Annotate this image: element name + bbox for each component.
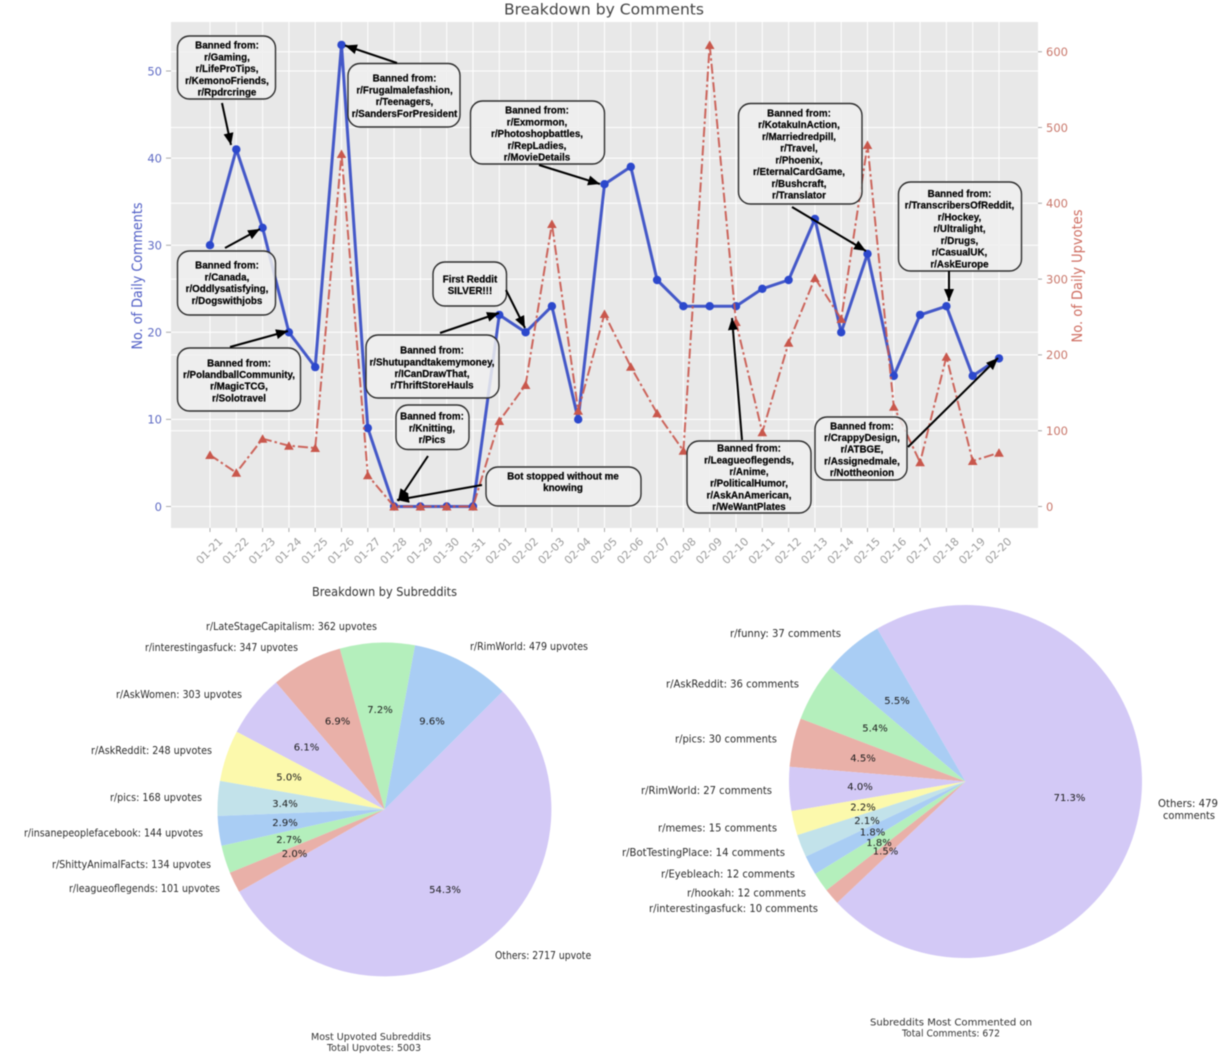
percentage labels: 3.4% [272,799,298,810]
callout: Frugalmalefashion bans: Banned from: [373,74,436,84]
callout: Leagueoflegends bans: r/WeWantPlates [712,502,786,513]
percentage labels: 2.0% [282,849,307,860]
callout: Gaming bans [178,36,276,99]
pie wedges [789,605,1142,958]
callout: KotakuInAction bans [738,104,862,204]
callout: Frugalmalefashion bans [348,64,460,127]
x axis date labels: 02-20 [983,535,1014,567]
x axis date labels: 02-07 [641,535,673,567]
percentage labels: 1.8% [866,838,892,849]
percentage labels: 4.0% [847,782,873,793]
slice labels: r/ShittyAnimalFacts: 134 upvotes [52,859,211,871]
x axis date labels: 02-17 [904,535,936,567]
x axis date labels: 02-19 [956,535,988,567]
percentage labels: 5.4% [862,723,888,734]
x axis date labels: 02-18 [930,535,962,567]
callout: TranscribersOfReddit bans [898,182,1022,271]
arrow: Leagueoflegends callout to 02-10 [732,318,742,440]
callout: First Reddit Silver: First Reddit [443,274,498,286]
right axis tick labels: 500 [1046,121,1068,135]
caption: Most Upvoted Subreddits: Most Upvoted Subreddits [311,1032,431,1043]
percentage labels: 5.0% [276,772,302,784]
callout: Exmormon bans: Banned from: [505,106,569,116]
x axis date labels: 02-01 [483,535,515,567]
x axis date labels: 01-30 [430,535,462,567]
callout: Exmormon bans: r/Photoshopbattles, [491,129,583,140]
left axis tick labels [147,64,162,514]
callout: CrappyDesign bans: r/ATBGE, [841,444,884,456]
x axis date labels: 02-12 [772,535,804,567]
slice labels: r/interestingasfuck: 10 comments [649,903,818,915]
slice labels: r/LateStageCapitalism: 362 upvotes [206,621,377,633]
callout: Exmormon bans: r/RepLadies, [508,141,567,152]
upvotes line series (red dash-dot) [210,45,999,506]
x axis date labels: 02-13 [799,535,830,567]
title: Breakdown by Comments: Breakdown by Comments [504,0,704,18]
x axis date labels: 01-27 [351,535,383,567]
x axis date labels: 01-28 [378,535,410,567]
callout: TranscribersOfReddit bans: r/CasualUK, [932,248,988,258]
callout: Canada bans: r/Canada, [205,272,250,284]
callout: Gaming bans: Banned from: [195,40,259,52]
slice labels: r/RimWorld: 27 comments [641,785,772,797]
comments line series (blue) [210,45,999,507]
x axis date labels: 02-05 [588,535,620,567]
slice labels: comments [1163,810,1215,822]
slice labels: r/pics: 30 comments [675,734,777,746]
callout: Bot stopped [486,467,641,506]
arrow: KotakuInAction callout to 02-15 [792,207,866,251]
percentage labels: 71.3% [1054,793,1085,804]
arrow: Exmormon callout to 02-05 [539,165,600,184]
x axis date labels: 02-08 [667,535,699,567]
heading: Breakdown by Subreddits: Breakdown by Subreddits [312,585,457,599]
left axis tick labels: 0 [155,500,162,514]
callout: Bot stopped: knowing [543,483,583,494]
callout: KotakuInAction bans: r/Translator [772,190,826,202]
slice labels: r/leagueoflegends: 101 upvotes [69,883,220,895]
callout: Shutupandtakemymoney bans [366,335,499,398]
callout: PolandballCommunity bans: r/MagicTCG, [210,382,268,392]
x axis date labels: 02-10 [720,535,751,567]
slice labels: r/AskWomen: 303 upvotes [116,689,242,701]
right axis tick labels: 600 [1046,45,1068,59]
callout: Frugalmalefashion bans: r/Frugalmalefashion, [356,86,453,96]
callout: Frugalmalefashion bans: r/SandersForPresident [352,109,458,120]
arrow: TranscribersOfReddit callout to 02-18 [948,271,950,301]
right axis tick labels: 400 [1046,196,1068,210]
callout: TranscribersOfReddit bans: Banned from: [928,189,991,200]
x axis date labels: 02-06 [614,535,646,567]
callout: KotakuInAction bans: r/Travel, [780,144,818,154]
slice labels: r/memes: 15 comments [658,822,777,834]
slice labels: r/pics: 168 upvotes [110,792,202,804]
arrow: PolandballCommunity callout to 01-24 [230,331,288,347]
right axis tick labels [1046,45,1068,514]
slice labels [24,621,596,962]
callout: TranscribersOfReddit bans: r/Hockey, [938,212,981,224]
callout: TranscribersOfReddit bans: r/Ultralight, [933,224,986,235]
callout: Shutupandtakemymoney bans: r/ICanDrawThat, [394,369,470,380]
callout: Knitting bans: Banned from: [400,412,464,422]
callout: First Reddit Silver: SILVER!!! [448,286,492,297]
panel: most upvoted subreddits pie [24,621,596,1054]
percentage labels: 1.5% [873,847,898,858]
slice labels: r/funny: 37 comments [730,628,841,640]
percentage labels: 5.5% [884,696,910,707]
slice labels: Others: 479 [1158,798,1218,810]
caption: Subreddits Most Commented on: Total Comments: 672 [901,1028,1000,1040]
plot background [171,22,1038,528]
callout: KotakuInAction bans: r/Phoenix, [775,156,823,166]
left axis tick labels: 10 [147,412,162,426]
callout: Gaming bans: r/LifeProTips, [196,64,259,75]
callout: KotakuInAction bans: r/Marriedredpill, [762,132,836,143]
pie wedges [217,642,551,976]
percentage labels: 6.1% [294,742,319,754]
percentage labels: 2.2% [850,803,876,814]
callout: TranscribersOfReddit bans: r/AskEurope [930,260,989,270]
x axis date labels: 02-16 [877,535,909,567]
callout: TranscribersOfReddit bans: r/Drugs, [941,236,979,247]
slice labels: r/BotTestingPlace: 14 comments [622,847,785,859]
arrow: CrappyDesign callout to 02-20 [908,358,998,447]
callout: Canada bans: r/Oddlysatisfying, [186,284,269,295]
callout: Leagueoflegends bans: Banned from: [717,444,781,454]
x axis date labels: 01-31 [457,535,488,567]
arrow: Gaming callout to 01-22 [222,103,231,145]
x axis date labels: 02-03 [536,535,567,567]
callout: KotakuInAction bans: r/KotakuInAction, [758,120,840,131]
percentage labels [847,696,1085,858]
callout: Leagueoflegends bans: r/Anime, [729,467,769,478]
callout: Leagueoflegends bans: r/PoliticalHumor, [710,478,788,490]
x axis date labels: 02-15 [851,535,883,567]
x axis date labels: 01-24 [273,535,304,567]
x axis date labels: 01-22 [220,535,252,567]
right axis tick labels: 200 [1046,348,1068,362]
callout: CrappyDesign bans: r/Nottheonion [830,468,894,479]
callout: Shutupandtakemymoney bans: r/ThriftStoreHauls [390,380,474,392]
callout: Leagueoflegends bans [687,441,811,513]
callout: Gaming bans: r/Gaming, [204,52,250,64]
panel: subreddits most commented on pie [622,605,1218,1040]
slice labels: r/interestingasfuck: 347 upvotes [145,642,298,654]
x axis date labels [194,535,1014,567]
callout: Knitting bans [396,405,469,450]
percentage labels: 9.6% [419,716,445,728]
caption: Most Upvoted Subreddits: Total Upvotes: 5003 [326,1043,421,1054]
slice labels: r/RimWorld: 479 upvotes [470,641,588,653]
slice labels: r/insanepeoplefacebook: 144 upvotes [24,828,203,840]
callout: Exmormon bans: r/Exmormon, [507,118,567,128]
callout: KotakuInAction bans: r/Bushcraft, [772,179,827,190]
arrow: Canada callout to 01-23 [225,229,260,248]
x axis date labels: 01-26 [325,535,357,567]
percentage labels: 2.1% [854,816,880,827]
callout: Knitting bans: r/Knitting, [409,424,455,434]
callout: Canada bans [178,251,276,315]
callout: Exmormon bans: r/MovieDetails [504,152,571,164]
x axis date labels: 01-23 [246,535,278,567]
callout: Gaming bans: r/Rpdrcringe [198,88,257,98]
percentage labels: 2.7% [276,835,302,846]
callout: TranscribersOfReddit bans: r/TranscribersOfReddit, [905,200,1014,212]
callout: First Reddit Silver [433,262,506,306]
callout: Bot stopped: Bot stopped without me [507,472,619,482]
slice labels: r/Eyebleach: 12 comments [661,868,795,880]
callout: Frugalmalefashion bans: r/Teenagers, [376,97,434,108]
right axis tick labels: 0 [1046,500,1053,514]
callout: CrappyDesign bans: r/CrappyDesign, [824,433,900,444]
callout: CrappyDesign bans: r/Assignedmale, [824,456,900,468]
percentage labels: 6.9% [325,716,350,728]
percentage labels: 1.8% [860,828,885,839]
arrow: Silver callout to 02-02 [506,290,525,328]
right axis tick labels: 100 [1046,424,1068,438]
right axis tick labels: 300 [1046,272,1068,286]
percentage labels: 54.3% [429,885,461,896]
callout: PolandballCommunity bans: r/PolandballCommunity, [183,370,295,381]
callout: Knitting bans: r/Pics [419,435,446,446]
left axis tick labels: 20 [147,326,162,340]
percentage labels [272,705,461,896]
caption: Subreddits Most Commented on: Subreddits Most Commented on [870,1018,1032,1028]
callout: PolandballCommunity bans: Banned from: [207,358,271,370]
callout: Shutupandtakemymoney bans: Banned from: [400,346,464,356]
callout: KotakuInAction bans: Banned from: [767,108,831,120]
x axis date labels: 02-11 [746,535,778,567]
arrow: Bot stopped callout to 01-28 [397,485,482,500]
percentage labels: 2.9% [272,818,298,829]
arrow: Knitting callout to 01-28 [398,456,428,501]
slice labels: Others: 2717 upvotes [495,950,596,962]
callout: Canada bans: Banned from: [195,260,259,272]
x axis date labels: 02-14 [825,535,857,567]
percentage labels: 4.5% [850,754,876,765]
slice labels: r/AskReddit: 36 comments [666,678,799,690]
slice labels: r/AskReddit: 248 upvotes [91,745,212,757]
callout: Leagueoflegends bans: r/Leagueoflegends, [704,456,794,466]
callout: Gaming bans: r/KemonoFriends, [185,76,269,87]
left axis tick labels: 40 [147,152,162,166]
x axis date labels: 02-09 [693,535,725,567]
slice labels: r/hookah: 12 comments [687,888,806,900]
x axis date labels: 01-29 [404,535,436,567]
callout: CrappyDesign bans [815,417,907,480]
callout: Canada bans: r/Dogswithjobs [192,296,263,307]
x axis date labels: 02-04 [562,535,594,567]
callout: Exmormon bans [470,101,604,164]
slice labels [622,628,1218,915]
arrow: Frugalmalefashion callout to 01-26 [345,46,397,63]
right axis label: No. of Daily Upvotes [1070,210,1086,342]
callout: PolandballCommunity bans: r/Solotravel [212,394,266,404]
callout: Leagueoflegends bans: r/AskAnAmerican, [707,490,792,502]
callout: KotakuInAction bans: r/EternalCardGame, [753,167,845,178]
callout: PolandballCommunity bans [178,348,300,411]
arrow: Shutupandtakemymoney callout to 02-01 [440,313,499,333]
x axis date labels: 01-21 [194,535,225,567]
callout: Shutupandtakemymoney bans: r/Shutupandtakemymoney, [369,358,495,368]
x axis date labels: 02-02 [509,535,541,567]
left axis tick labels: 50 [147,64,162,78]
panel: line chart of daily comments and upvotes [130,22,1086,567]
x axis date labels: 01-25 [299,535,331,567]
percentage labels: 7.2% [367,705,393,716]
left axis tick labels: 30 [147,238,162,252]
callout: CrappyDesign bans: Banned from: [830,422,894,432]
left axis label: No. of Daily Comments [130,202,146,350]
